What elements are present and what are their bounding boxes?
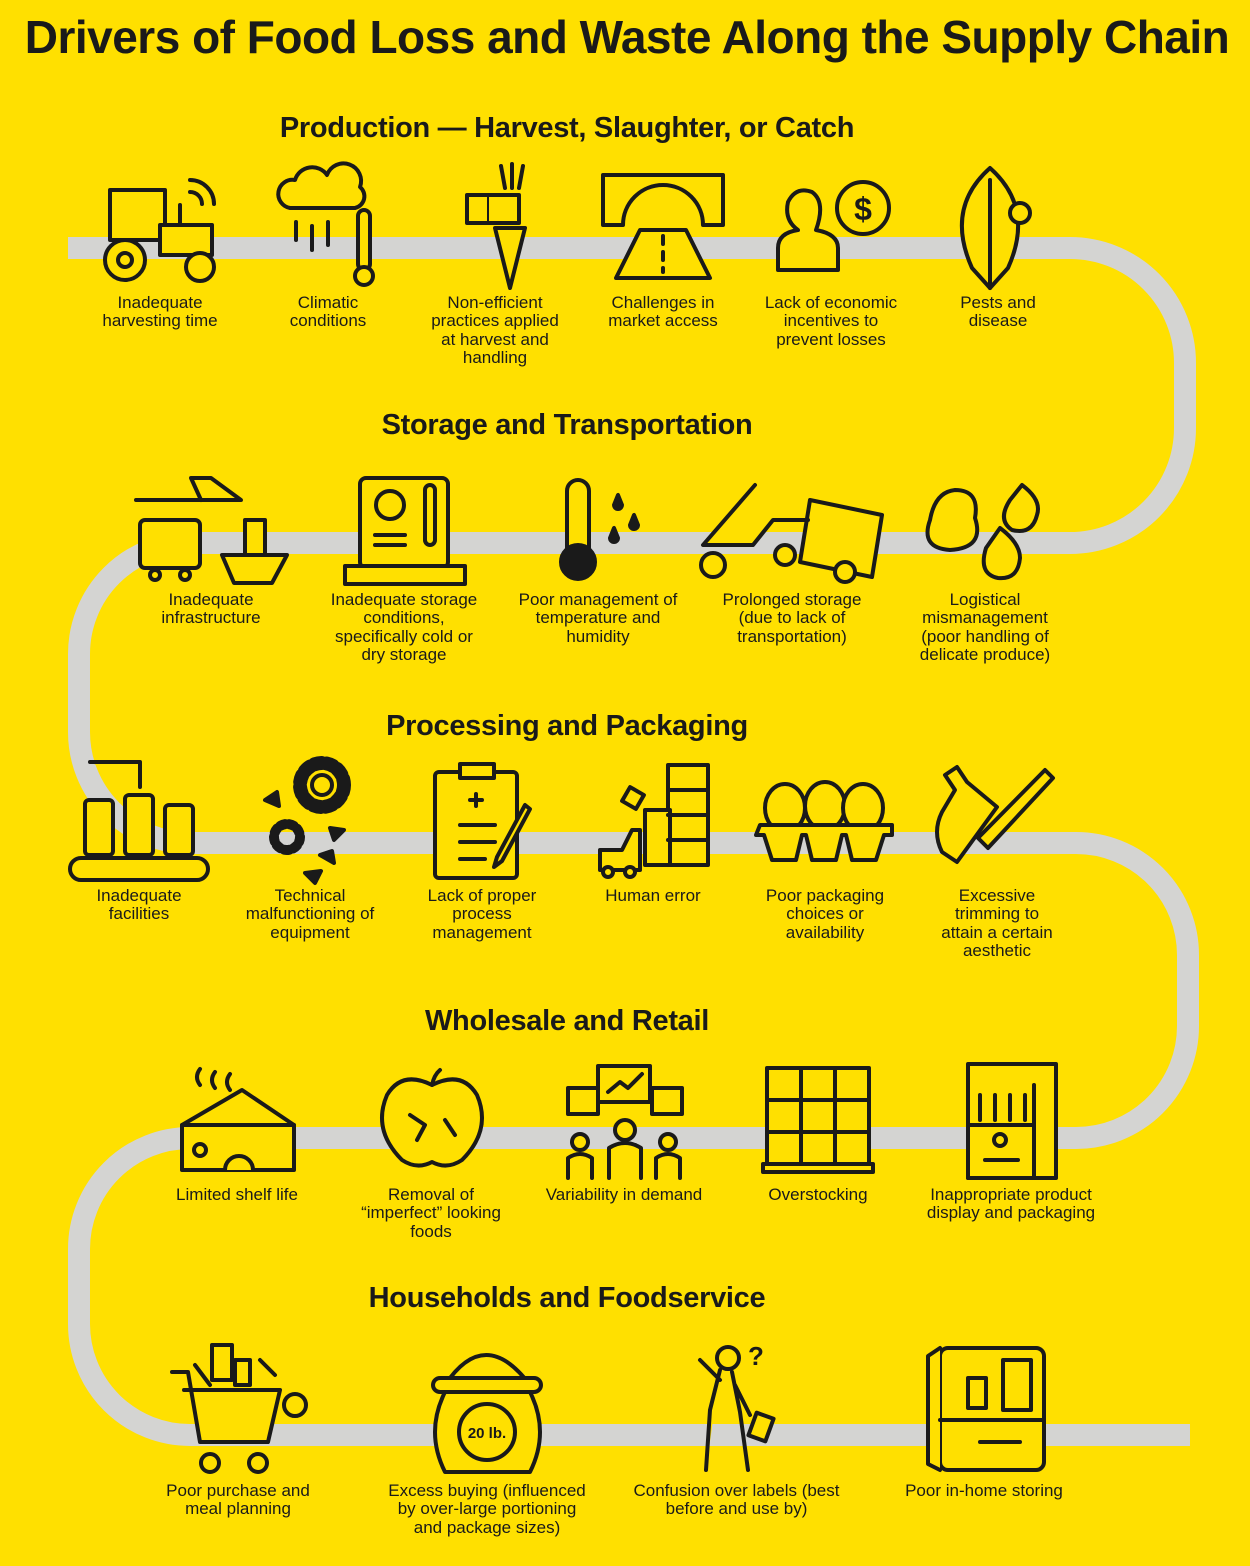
labels: wholesale: Limited shelf life (176, 1185, 298, 1204)
heading: wholesale: Wholesale and Retail (425, 1005, 709, 1037)
labels: processing: Technical malfunctioning of equipment (246, 886, 374, 942)
icon: display shelf (968, 1064, 1056, 1178)
labels: wholesale: Inappropriate product display and packaging (927, 1185, 1095, 1222)
icon: thermometer humidity (561, 480, 638, 579)
labels: wholesale (176, 1185, 1095, 1241)
icon: flour sack (433, 1355, 541, 1472)
heading: processing: Processing and Packaging (386, 710, 748, 742)
labels: production: Non-efficient practices applied at harvest and handling (431, 293, 559, 367)
labels: production: Pests and disease (960, 293, 1036, 330)
icon: gears (265, 763, 344, 883)
labels: production: Lack of economic incentives to prevent losses (765, 293, 897, 349)
icon: flour sack: 20 lb. (468, 1425, 506, 1442)
labels: storage: Inadequate infrastructure (161, 590, 261, 627)
labels: storage: Inadequate storage conditions, specifically cold or dry storage (331, 590, 477, 664)
labels: households: Poor purchase and meal planning (166, 1481, 310, 1518)
icon: knife board (937, 767, 1053, 862)
icon: hand carrot (467, 164, 525, 288)
icon: clipboard (435, 764, 530, 878)
icon: tow truck (701, 485, 882, 582)
labels: wholesale: Overstocking (768, 1185, 868, 1204)
labels: households: Confusion over labels (best before and use by) (633, 1481, 840, 1518)
heading: production: Production — Harvest, Slaughter, or Catch (280, 112, 854, 144)
icon: bottles conveyor (70, 762, 208, 880)
icon: cloud rain thermometer (278, 163, 373, 285)
labels: households: Excess buying (influenced by over-large portioning and package sizes) (388, 1481, 586, 1537)
labels: processing: Excessive trimming to attain a certain aesthetic (941, 886, 1053, 960)
labels: households: Poor in-home storing (905, 1481, 1063, 1500)
title: Drivers of Food Loss and Waste Along the Supply Chain (25, 11, 1229, 63)
icon: person dollar (778, 182, 889, 270)
icon: confused person (700, 1341, 774, 1470)
icon: person dollar: $ (854, 191, 872, 227)
icon: cold storage (345, 478, 465, 584)
labels: processing (96, 886, 1053, 960)
supply chain path (68, 248, 1190, 1435)
labels: storage: Poor management of temperature and humidity (519, 590, 677, 646)
labels: processing: Lack of proper process management (428, 886, 536, 942)
icon: confused person: ? (748, 1341, 764, 1371)
labels: production: Climatic conditions (290, 293, 366, 330)
icon: forklift boxes (600, 765, 708, 877)
icon: cheese (182, 1069, 294, 1170)
heading: households: Households and Foodservice (369, 1282, 765, 1314)
labels: production: Inadequate harvesting time (102, 293, 218, 330)
icon: bad apple (382, 1070, 482, 1166)
labels: wholesale: Removal of “imperfect” looking foods (361, 1185, 501, 1241)
labels: processing: Poor packaging choices or availability (766, 886, 884, 942)
labels: processing: Human error (605, 886, 701, 905)
labels: households (166, 1481, 1063, 1537)
icon: road market (603, 175, 723, 278)
labels: storage (161, 590, 1050, 664)
labels: processing: Inadequate facilities (96, 886, 182, 923)
icon: pallet boxes (763, 1068, 873, 1172)
labels: production: Challenges in market access (608, 293, 718, 330)
icon: sad pears (928, 485, 1038, 578)
icon: open fridge (928, 1348, 1044, 1470)
icon: plane truck ship (136, 478, 287, 583)
icon: eggs carton (756, 782, 892, 860)
icon: shopping cart (172, 1345, 306, 1472)
icon: demand people (568, 1066, 682, 1178)
icon: leaf pest (962, 168, 1030, 288)
labels: production (102, 293, 1036, 367)
heading: storage: Storage and Transportation (382, 409, 752, 441)
labels: storage: Prolonged storage (due to lack of transportation) (723, 590, 861, 646)
labels: storage: Logistical mismanagement (poor handling of delicate produce) (920, 590, 1050, 664)
labels: wholesale: Variability in demand (546, 1185, 702, 1204)
icon: tractor (105, 180, 214, 281)
